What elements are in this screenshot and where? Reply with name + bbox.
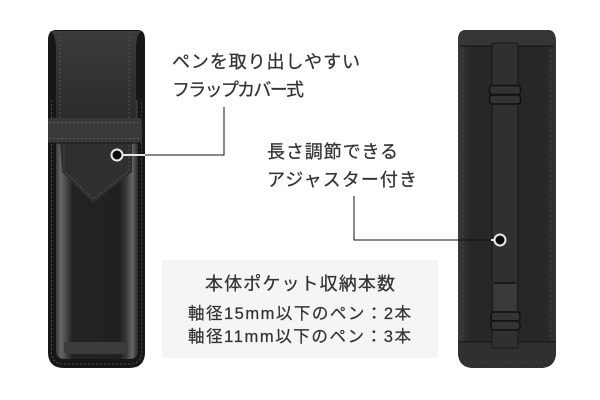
capacity line 2: 軸径11mm以下のペン：3本 xyxy=(188,327,412,346)
top adjuster buckle xyxy=(490,86,520,104)
band xyxy=(48,118,142,143)
text: adjuster feature xyxy=(267,142,417,190)
top band xyxy=(458,30,556,46)
panel: pocket capacity xyxy=(162,260,438,358)
panel: back of pen case xyxy=(458,30,556,368)
text: flap cover feature: ペンを取り出しやすい xyxy=(172,52,360,72)
flap xyxy=(50,31,142,118)
case body xyxy=(48,30,145,368)
callout line: flap xyxy=(112,107,224,160)
pocket xyxy=(56,100,138,359)
bottom band xyxy=(458,342,556,368)
text: adjuster feature: 長さ調節できる xyxy=(267,142,398,162)
text: flap cover feature: フラップカバー式 xyxy=(172,80,304,100)
elastic strap xyxy=(492,43,518,348)
text: adjuster feature: アジャスター付き xyxy=(267,170,417,190)
text: flap cover feature xyxy=(172,52,360,100)
body stitching xyxy=(52,100,142,364)
callout line: adjuster xyxy=(354,196,506,246)
panel: front of pen case xyxy=(48,30,145,368)
panel heading: 本体ポケット収納本数 xyxy=(205,274,395,294)
bottom adjuster buckle xyxy=(491,312,520,330)
panel background xyxy=(162,260,438,358)
capacity line 1: 軸径15mm以下のペン：2本 xyxy=(188,304,412,323)
back body xyxy=(458,30,556,368)
